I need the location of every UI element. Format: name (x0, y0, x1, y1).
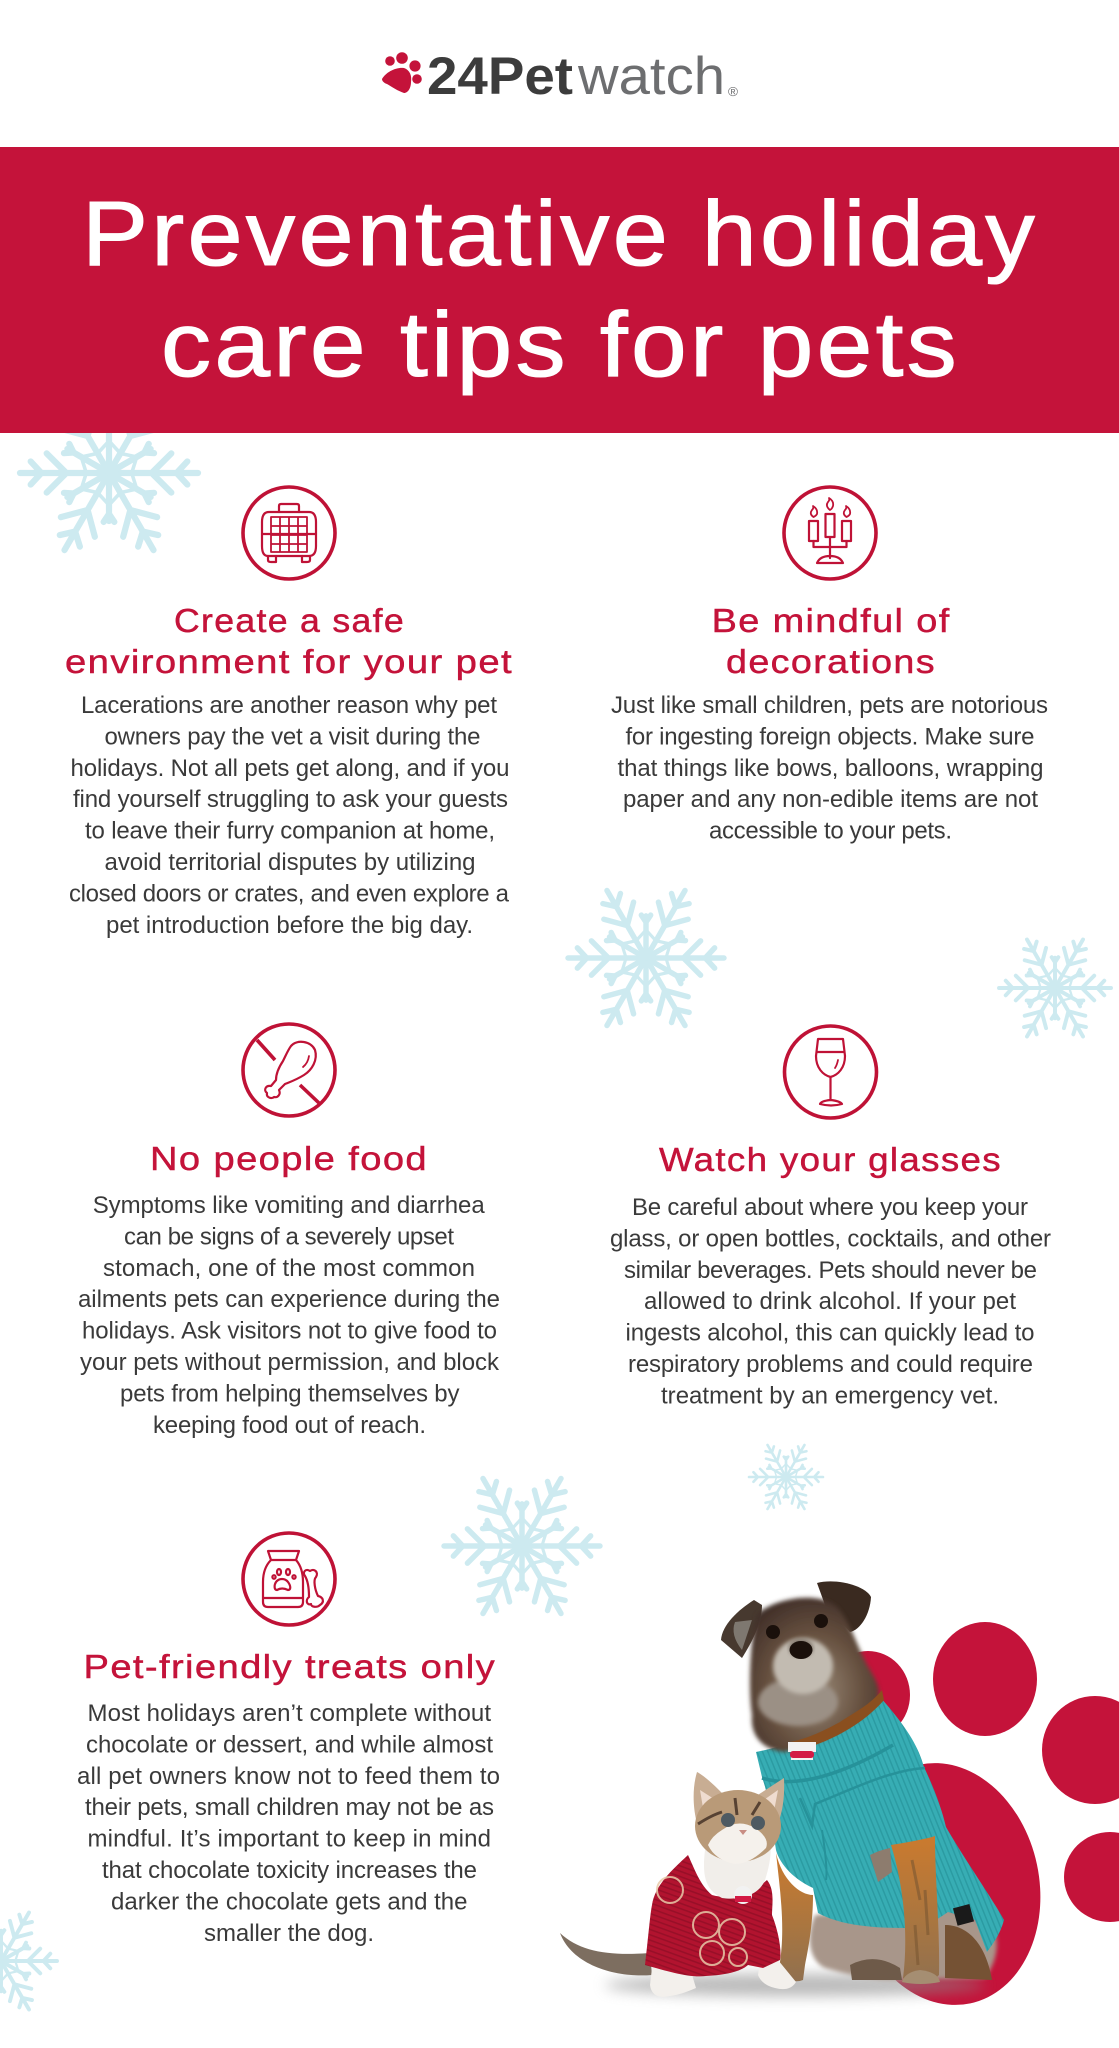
panel: be mindful of decorations (611, 487, 1048, 845)
body text: Most holidays aren’t complete without (88, 1700, 491, 1727)
body text: paper and any non-edible items are not (623, 786, 1038, 813)
dog front leg (891, 1836, 939, 1983)
body text: mindful. It’s important to keep in mind (88, 1826, 491, 1853)
kitten sweater (645, 1855, 781, 1976)
dog (721, 1581, 1004, 1984)
heading: environment for your pet (65, 643, 513, 680)
kitten eyes and nose (721, 1813, 735, 1827)
body text: owners pay the vet a visit during the (104, 723, 480, 750)
body text: pet introduction before the big day. (106, 912, 473, 939)
photo: dog and kitten in sweaters (560, 1581, 1004, 1997)
body text: Just like small children, pets are notorious (611, 692, 1048, 719)
heading: Be mindful of (712, 602, 951, 639)
heading (712, 602, 951, 680)
title (82, 183, 1038, 396)
kitten head (695, 1790, 781, 1862)
kitten paws (650, 1968, 696, 1997)
title band (0, 147, 1119, 433)
kitten tag (734, 1886, 752, 1904)
heading: Watch your glasses (659, 1141, 1002, 1178)
title: care tips for pets (161, 294, 960, 396)
snowflake bottom left (0, 1903, 57, 2019)
registered mark: ® (728, 84, 738, 99)
logo wordmark bold: 24Pet (427, 47, 573, 106)
panel: no people food (78, 1024, 500, 1439)
snowflake far right (999, 930, 1111, 1046)
icon: food bag and bone (243, 1533, 335, 1625)
body text: can be signs of a severely upset (124, 1223, 454, 1250)
snowflake small (749, 1439, 823, 1515)
body text: smaller the dog. (204, 1920, 374, 1947)
red paw print background (826, 1622, 1119, 2023)
body text: that chocolate toxicity increases the (102, 1857, 477, 1884)
body text: to leave their furry companion at home, (85, 818, 495, 845)
body text: stomach, one of the most common (103, 1255, 475, 1282)
kitten (560, 1772, 796, 1997)
dog near leg (776, 1853, 813, 1981)
panel: watch your glasses (610, 1026, 1051, 1409)
dog ears (721, 1600, 762, 1658)
body text: closed doors or crates, and even explore a (69, 880, 510, 907)
body text: ailments pets can experience during the (78, 1286, 500, 1313)
body text (611, 692, 1048, 845)
body text: their pets, small children may not be as (85, 1794, 494, 1821)
body text: darker the chocolate gets and the (111, 1888, 468, 1915)
icon: pet carrier (243, 487, 335, 579)
ground shadow (605, 1974, 985, 1996)
body text: Lacerations are another reason why pet (81, 692, 497, 719)
panel: pet-friendly treats only (77, 1533, 500, 1947)
dog eyes and nose (766, 1614, 828, 1659)
snowflake top left (20, 381, 198, 565)
sweater strap (953, 1904, 974, 1926)
heading: No people food (150, 1140, 428, 1177)
icon: crossed out chicken leg (243, 1024, 335, 1116)
dog muzzle (773, 1638, 833, 1694)
body text: all pet owners know not to feed them to (77, 1763, 500, 1790)
title: Preventative holiday (82, 183, 1038, 285)
body text (610, 1194, 1051, 1409)
dog sweater (756, 1697, 1004, 1952)
body text: find yourself struggling to ask your guests (73, 786, 508, 813)
icon: wine glass (784, 1026, 876, 1118)
logo wordmark light: watch (577, 47, 725, 106)
snowflake centre right (568, 878, 724, 1038)
body text (69, 692, 510, 939)
body text (78, 1192, 500, 1439)
heading (65, 602, 513, 680)
body text: ingests alcohol, this can quickly lead to (626, 1320, 1034, 1347)
kitten ears (694, 1772, 784, 1835)
dog paws (902, 1970, 940, 1984)
kitten sweater pattern (657, 1877, 747, 1966)
body text: chocolate or dessert, and while almost (86, 1731, 493, 1758)
body text: similar beverages. Pets should never be (624, 1257, 1037, 1284)
snowflake lower centre (444, 1466, 600, 1626)
heading: Create a safe (174, 602, 405, 639)
dog head and neck fur (750, 1598, 879, 1752)
body text: treatment by an emergency vet. (661, 1382, 999, 1409)
body text: pets from helping themselves by (120, 1380, 460, 1407)
body text: your pets without permission, and block (80, 1349, 500, 1376)
body text (77, 1700, 500, 1947)
body text: for ingesting foreign objects. Make sure (626, 723, 1034, 750)
body text: that things like bows, balloons, wrapping (618, 755, 1044, 782)
kitten tail (560, 1933, 652, 1975)
logo (382, 47, 738, 106)
body text: respiratory problems and could require (628, 1351, 1033, 1378)
dog hind body (810, 1905, 997, 1980)
heading: decorations (726, 643, 936, 680)
panel: create a safe environment (65, 487, 513, 939)
body text: accessible to your pets. (709, 818, 952, 845)
body text: keeping food out of reach. (153, 1412, 426, 1439)
body text: holidays. Not all pets get along, and if you (70, 755, 510, 782)
body text: Symptoms like vomiting and diarrhea (93, 1192, 485, 1219)
kitten chest (704, 1840, 771, 1899)
body text: avoid territorial disputes by utilizing (104, 849, 476, 876)
icon: logo paw (382, 52, 422, 93)
body text: glass, or open bottles, cocktails, and other (610, 1225, 1051, 1252)
icon: candelabra (784, 487, 876, 579)
dog tag (788, 1742, 816, 1760)
body text: allowed to drink alcohol. If your pet (644, 1288, 1016, 1315)
body text: Be careful about where you keep your (632, 1194, 1028, 1221)
heading: Pet-friendly treats only (84, 1648, 496, 1685)
dog chest fur (758, 1678, 838, 1726)
body text: holidays. Ask visitors not to give food to (82, 1318, 497, 1345)
